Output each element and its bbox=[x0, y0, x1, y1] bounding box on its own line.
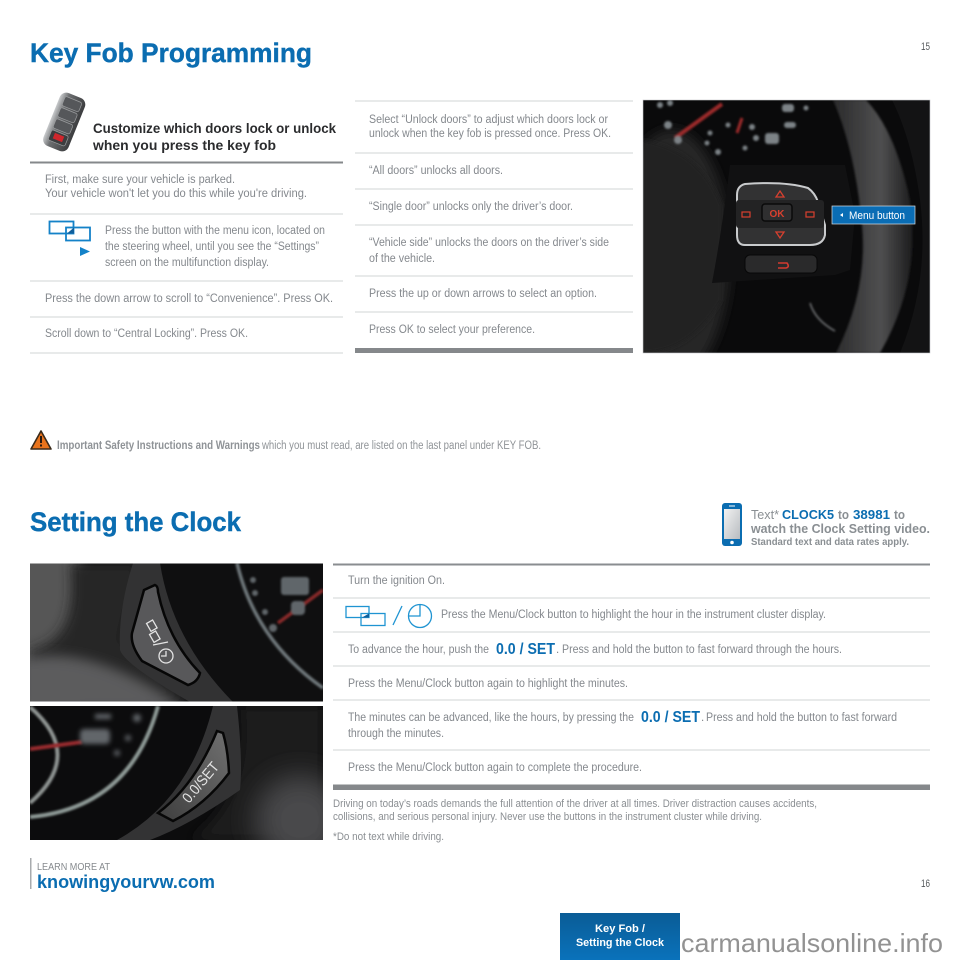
icon: menu button bbox=[50, 222, 90, 256]
title: Key Fob Programming: Key Fob Programming bbox=[30, 38, 312, 68]
panel: clock steps bbox=[333, 564, 930, 790]
learn more link bbox=[30, 858, 215, 892]
text: CLOCK5 to 38981: 38981 bbox=[853, 507, 890, 522]
step: advance minutes: The minutes can be advanced, like the hours, by pressing the bbox=[348, 712, 634, 724]
disclaimer text: collisions, and serious personal injury. Never use the buttons in the instrument cluster while driving. bbox=[333, 811, 762, 823]
step: advance minutes: 0.0 / SET bbox=[641, 709, 700, 726]
safety warning bbox=[31, 431, 541, 452]
step: first, parked: Your vehicle won't let you do this while you're driving. bbox=[45, 188, 307, 200]
icon: warning triangle bbox=[31, 431, 51, 449]
callout: menu button bbox=[832, 206, 915, 224]
step: menu icon instruction: screen on the multifunction display. bbox=[105, 257, 269, 269]
learn more link: knowingyourvw.com bbox=[37, 872, 215, 892]
step: first, parked: First, make sure your vehicle is parked. bbox=[45, 174, 235, 186]
photo: steering wheel controls bbox=[643, 100, 930, 353]
step: central locking: Scroll down to “Central Locking”. Press OK. bbox=[45, 328, 248, 340]
warning text bbox=[57, 440, 541, 452]
step: ignition on: Turn the ignition On. bbox=[348, 575, 445, 587]
step: select unlock doors: Select “Unlock doors” to adjust which doors lock or bbox=[369, 114, 608, 126]
step: select unlock doors bbox=[369, 114, 611, 140]
step: all doors: “All doors” unlocks all doors. bbox=[369, 165, 503, 177]
panel: customize steps bbox=[30, 91, 343, 353]
heading: customize doors: Customize which doors lock or unlock bbox=[93, 120, 336, 136]
navigation tab: Setting the Clock bbox=[576, 937, 665, 949]
watermark: carmanualsonline.info bbox=[681, 928, 943, 958]
step: advance minutes: . bbox=[701, 712, 704, 724]
icon: key fob bbox=[41, 91, 87, 154]
step: first, parked bbox=[45, 174, 307, 200]
title: Setting the Clock: Setting the Clock bbox=[30, 507, 242, 537]
step: advance the hour: . bbox=[556, 644, 559, 656]
step: vehicle side: of the vehicle. bbox=[369, 253, 435, 265]
step: menu icon instruction bbox=[105, 225, 325, 269]
learn more link: LEARN MORE AT bbox=[37, 862, 110, 873]
text: CLOCK5 to 38981 bbox=[750, 507, 930, 548]
icon: menu and clock buttons bbox=[346, 604, 432, 628]
warning text: Important Safety Instructions and Warnings bbox=[57, 440, 260, 452]
page number 15: 15 bbox=[921, 41, 930, 53]
heading: customize doors bbox=[92, 120, 336, 153]
step: single door: “Single door” unlocks only the driver’s door. bbox=[369, 201, 573, 213]
text: CLOCK5 to 38981: watch the Clock Setting video. bbox=[750, 521, 930, 536]
step: complete procedure: Press the Menu/Clock button again to complete the procedure. bbox=[348, 762, 642, 774]
step: vehicle side: “Vehicle side” unlocks the doors on the driver’s side bbox=[369, 237, 609, 249]
step: menu icon instruction: Press the button with the menu icon, located on bbox=[105, 225, 325, 237]
step: press OK: Press OK to select your preference. bbox=[369, 324, 535, 336]
step: up or down arrows: Press the up or down arrows to select an option. bbox=[369, 288, 597, 300]
text: CLOCK5 to 38981: Standard text and data rates apply. bbox=[751, 537, 909, 548]
callout: menu button: Menu button bbox=[849, 210, 905, 222]
disclaimer text: *Do not text while driving. bbox=[333, 831, 444, 843]
photo: 0.0/SET button bbox=[30, 706, 323, 840]
step: vehicle side bbox=[369, 237, 609, 265]
step: select unlock doors: unlock when the key fob is pressed once. Press OK. bbox=[369, 128, 611, 140]
step: menu icon instruction: the steering wheel, until you see the “Settings” bbox=[105, 241, 319, 253]
navigation tab bbox=[560, 913, 680, 960]
step: press menu clock: Press the Menu/Clock button to highlight the hour in the instrument cluster display. bbox=[441, 609, 826, 621]
navigation tab: Key Fob / bbox=[595, 923, 645, 935]
step: advance the hour: 0.0 / SET bbox=[496, 641, 555, 658]
text: CLOCK5 to 38981: CLOCK5 bbox=[782, 507, 834, 522]
step: advance minutes bbox=[348, 709, 897, 740]
step: highlight minutes: Press the Menu/Clock button again to highlight the minutes. bbox=[348, 678, 628, 690]
step: advance the hour: To advance the hour, push the bbox=[348, 644, 489, 656]
step: advance minutes: through the minutes. bbox=[348, 728, 444, 740]
step: advance the hour: Press and hold the button to fast forward through the hours. bbox=[562, 644, 842, 656]
heading: customize doors: when you press the key fob bbox=[92, 137, 276, 153]
disclaimer text bbox=[333, 798, 817, 843]
photo: 0.0/SET button: 0.0/SET bbox=[179, 759, 223, 807]
text: CLOCK5 to 38981: to bbox=[838, 507, 849, 522]
panel: unlock options bbox=[355, 101, 633, 353]
photo: menu clock button bbox=[30, 564, 323, 702]
icon: smartphone bbox=[722, 503, 742, 546]
text callout: phone video bbox=[722, 503, 930, 548]
warning text: which you must read, are listed on the last panel under KEY FOB. bbox=[261, 440, 541, 452]
text: CLOCK5 to 38981: Text* bbox=[751, 507, 779, 522]
photo: steering wheel controls: OK bbox=[770, 209, 785, 220]
text: CLOCK5 to 38981: to bbox=[894, 507, 905, 522]
page number 16: 16 bbox=[921, 878, 930, 890]
disclaimer text: Driving on today’s roads demands the full attention of the driver at all times. Driver distraction causes accidents, bbox=[333, 798, 817, 810]
step: advance minutes: Press and hold the button to fast forward bbox=[706, 712, 897, 724]
step: advance the hour bbox=[348, 641, 842, 658]
step: convenience: Press the down arrow to scroll to “Convenience”. Press OK. bbox=[45, 293, 333, 305]
